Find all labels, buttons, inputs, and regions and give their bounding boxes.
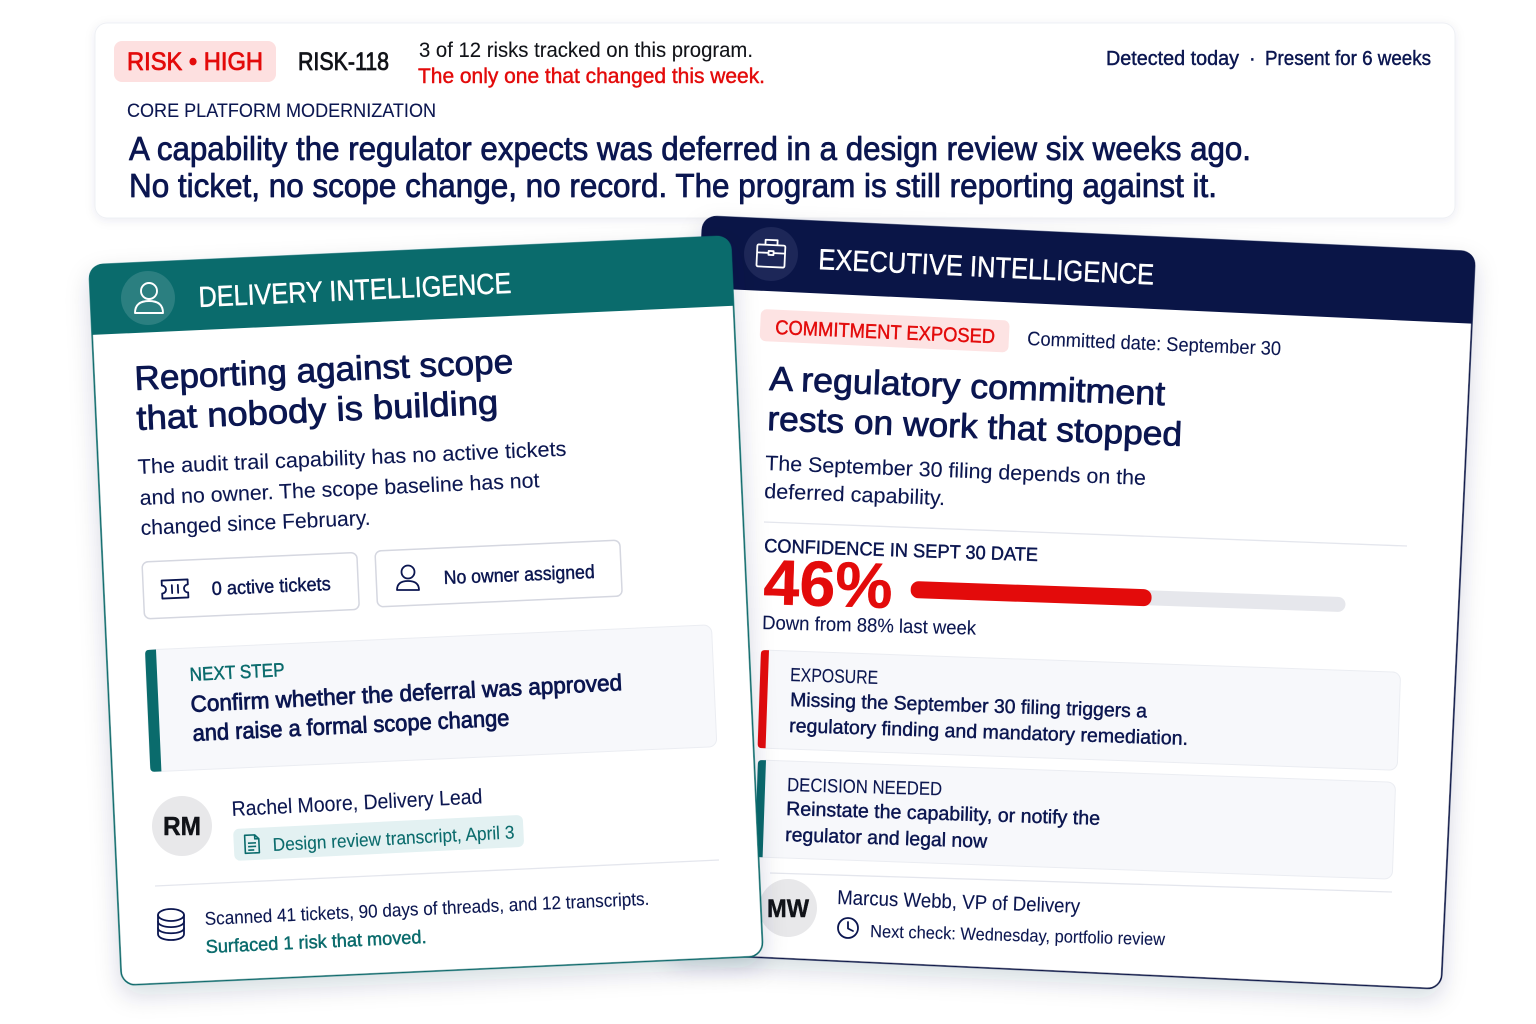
chip: active tickets	[142, 552, 359, 619]
chip: evidence source	[233, 815, 524, 861]
executive headline: rests on work that stopped	[767, 400, 1183, 454]
icon: ticket	[162, 579, 188, 599]
detection status: Detected today	[1106, 48, 1239, 70]
next check: Next check: Wednesday, portfolio review	[870, 921, 1166, 949]
delivery summary	[137, 438, 567, 540]
badge: commitment exposed	[760, 309, 1010, 352]
callout: decision needed: regulator and legal now	[785, 824, 988, 853]
executive summary: The September 30 filing depends on the	[765, 452, 1146, 490]
confidence value: 46%	[763, 546, 894, 622]
chip: no owner	[375, 540, 622, 607]
panel: delivery intelligence	[89, 236, 763, 985]
callout: next step	[145, 625, 717, 772]
panel body	[89, 236, 763, 985]
delivery summary: and no owner. The scope baseline has not	[139, 469, 540, 510]
scan summary: Surfaced 1 risk that moved.	[205, 926, 427, 957]
risk headline: A capability the regulator expects was deferred in a design review six weeks ago.	[129, 130, 1251, 167]
icon: database	[158, 909, 184, 940]
executive summary	[764, 452, 1146, 510]
icon: document	[245, 835, 259, 853]
delivery summary: The audit trail capability has no active tickets	[137, 438, 567, 479]
avatar: MW	[759, 879, 817, 937]
risk id: RISK-118	[298, 48, 389, 76]
detection status: Present for 6 weeks	[1265, 48, 1431, 70]
confidence change: Down from 88% last week	[762, 612, 977, 640]
callout: decision needed	[755, 760, 1396, 879]
delivery headline: that nobody is building	[136, 384, 499, 438]
detection status: ·	[1249, 48, 1256, 70]
icon: owner person	[397, 566, 419, 590]
program label: CORE PLATFORM MODERNIZATION	[127, 101, 436, 122]
delivery heading: DELIVERY INTELLIGENCE	[198, 268, 512, 314]
executive headline: A regulatory commitment	[769, 360, 1166, 413]
scan summary: Scanned 41 tickets, 90 days of threads, and 12 transcripts.	[204, 888, 650, 929]
executive summary: deferred capability.	[764, 480, 946, 510]
delivery summary: changed since February.	[140, 507, 371, 540]
chip: no owner: No owner assigned	[443, 562, 595, 589]
chip: evidence source: Design review transcript, April 3	[272, 821, 515, 855]
delivery owner: Rachel Moore, Delivery Lead	[231, 785, 483, 821]
executive headline	[767, 360, 1183, 454]
callout: exposure: Missing the September 30 filing triggers a	[790, 689, 1148, 723]
risk count note	[418, 39, 765, 88]
callout: decision needed: Reinstate the capability, or notify the	[786, 798, 1100, 830]
risk headline	[129, 130, 1251, 204]
chip: active tickets: 0 active tickets	[211, 574, 331, 600]
callout: exposure	[758, 650, 1401, 770]
badge: risk high	[114, 41, 276, 82]
scan summary	[204, 888, 650, 957]
callout: next step: NEXT STEP	[189, 660, 285, 686]
icon: briefcase	[744, 227, 798, 281]
icon: clock	[838, 918, 858, 938]
executive heading: EXECUTIVE INTELLIGENCE	[818, 244, 1155, 292]
committed date: Committed date: September 30	[1027, 328, 1282, 360]
callout: next step: and raise a formal scope change	[192, 705, 510, 746]
avatar: RM	[152, 796, 212, 856]
badge: commitment exposed: COMMITMENT EXPOSED	[775, 317, 996, 348]
panel body	[669, 216, 1475, 989]
risk headline: No ticket, no scope change, no record. The program is still reporting against it.	[129, 167, 1217, 204]
progress bar	[910, 581, 1346, 612]
risk count note: 3 of 12 risks tracked on this program.	[419, 39, 753, 62]
callout: next step: Confirm whether the deferral was approved	[190, 669, 623, 717]
confidence label: CONFIDENCE IN SEPT 30 DATE	[764, 536, 1038, 566]
badge: risk high: RISK • HIGH	[127, 48, 263, 76]
callout: exposure: EXPOSURE	[790, 665, 878, 689]
executive owner: Marcus Webb, VP of Delivery	[837, 887, 1080, 918]
delivery headline: Reporting against scope	[134, 343, 514, 398]
icon: person	[121, 271, 175, 325]
avatar: MW: MW	[767, 895, 809, 923]
callout: exposure: regulatory finding and mandatory remediation.	[789, 715, 1188, 750]
panel: risk summary card	[95, 23, 1455, 218]
panel: executive intelligence	[669, 216, 1475, 989]
avatar: RM: RM	[163, 811, 201, 841]
callout: decision needed: DECISION NEEDED	[787, 775, 942, 800]
risk count note: The only one that changed this week.	[418, 65, 765, 88]
detection status	[1106, 48, 1431, 70]
delivery headline	[134, 343, 514, 438]
